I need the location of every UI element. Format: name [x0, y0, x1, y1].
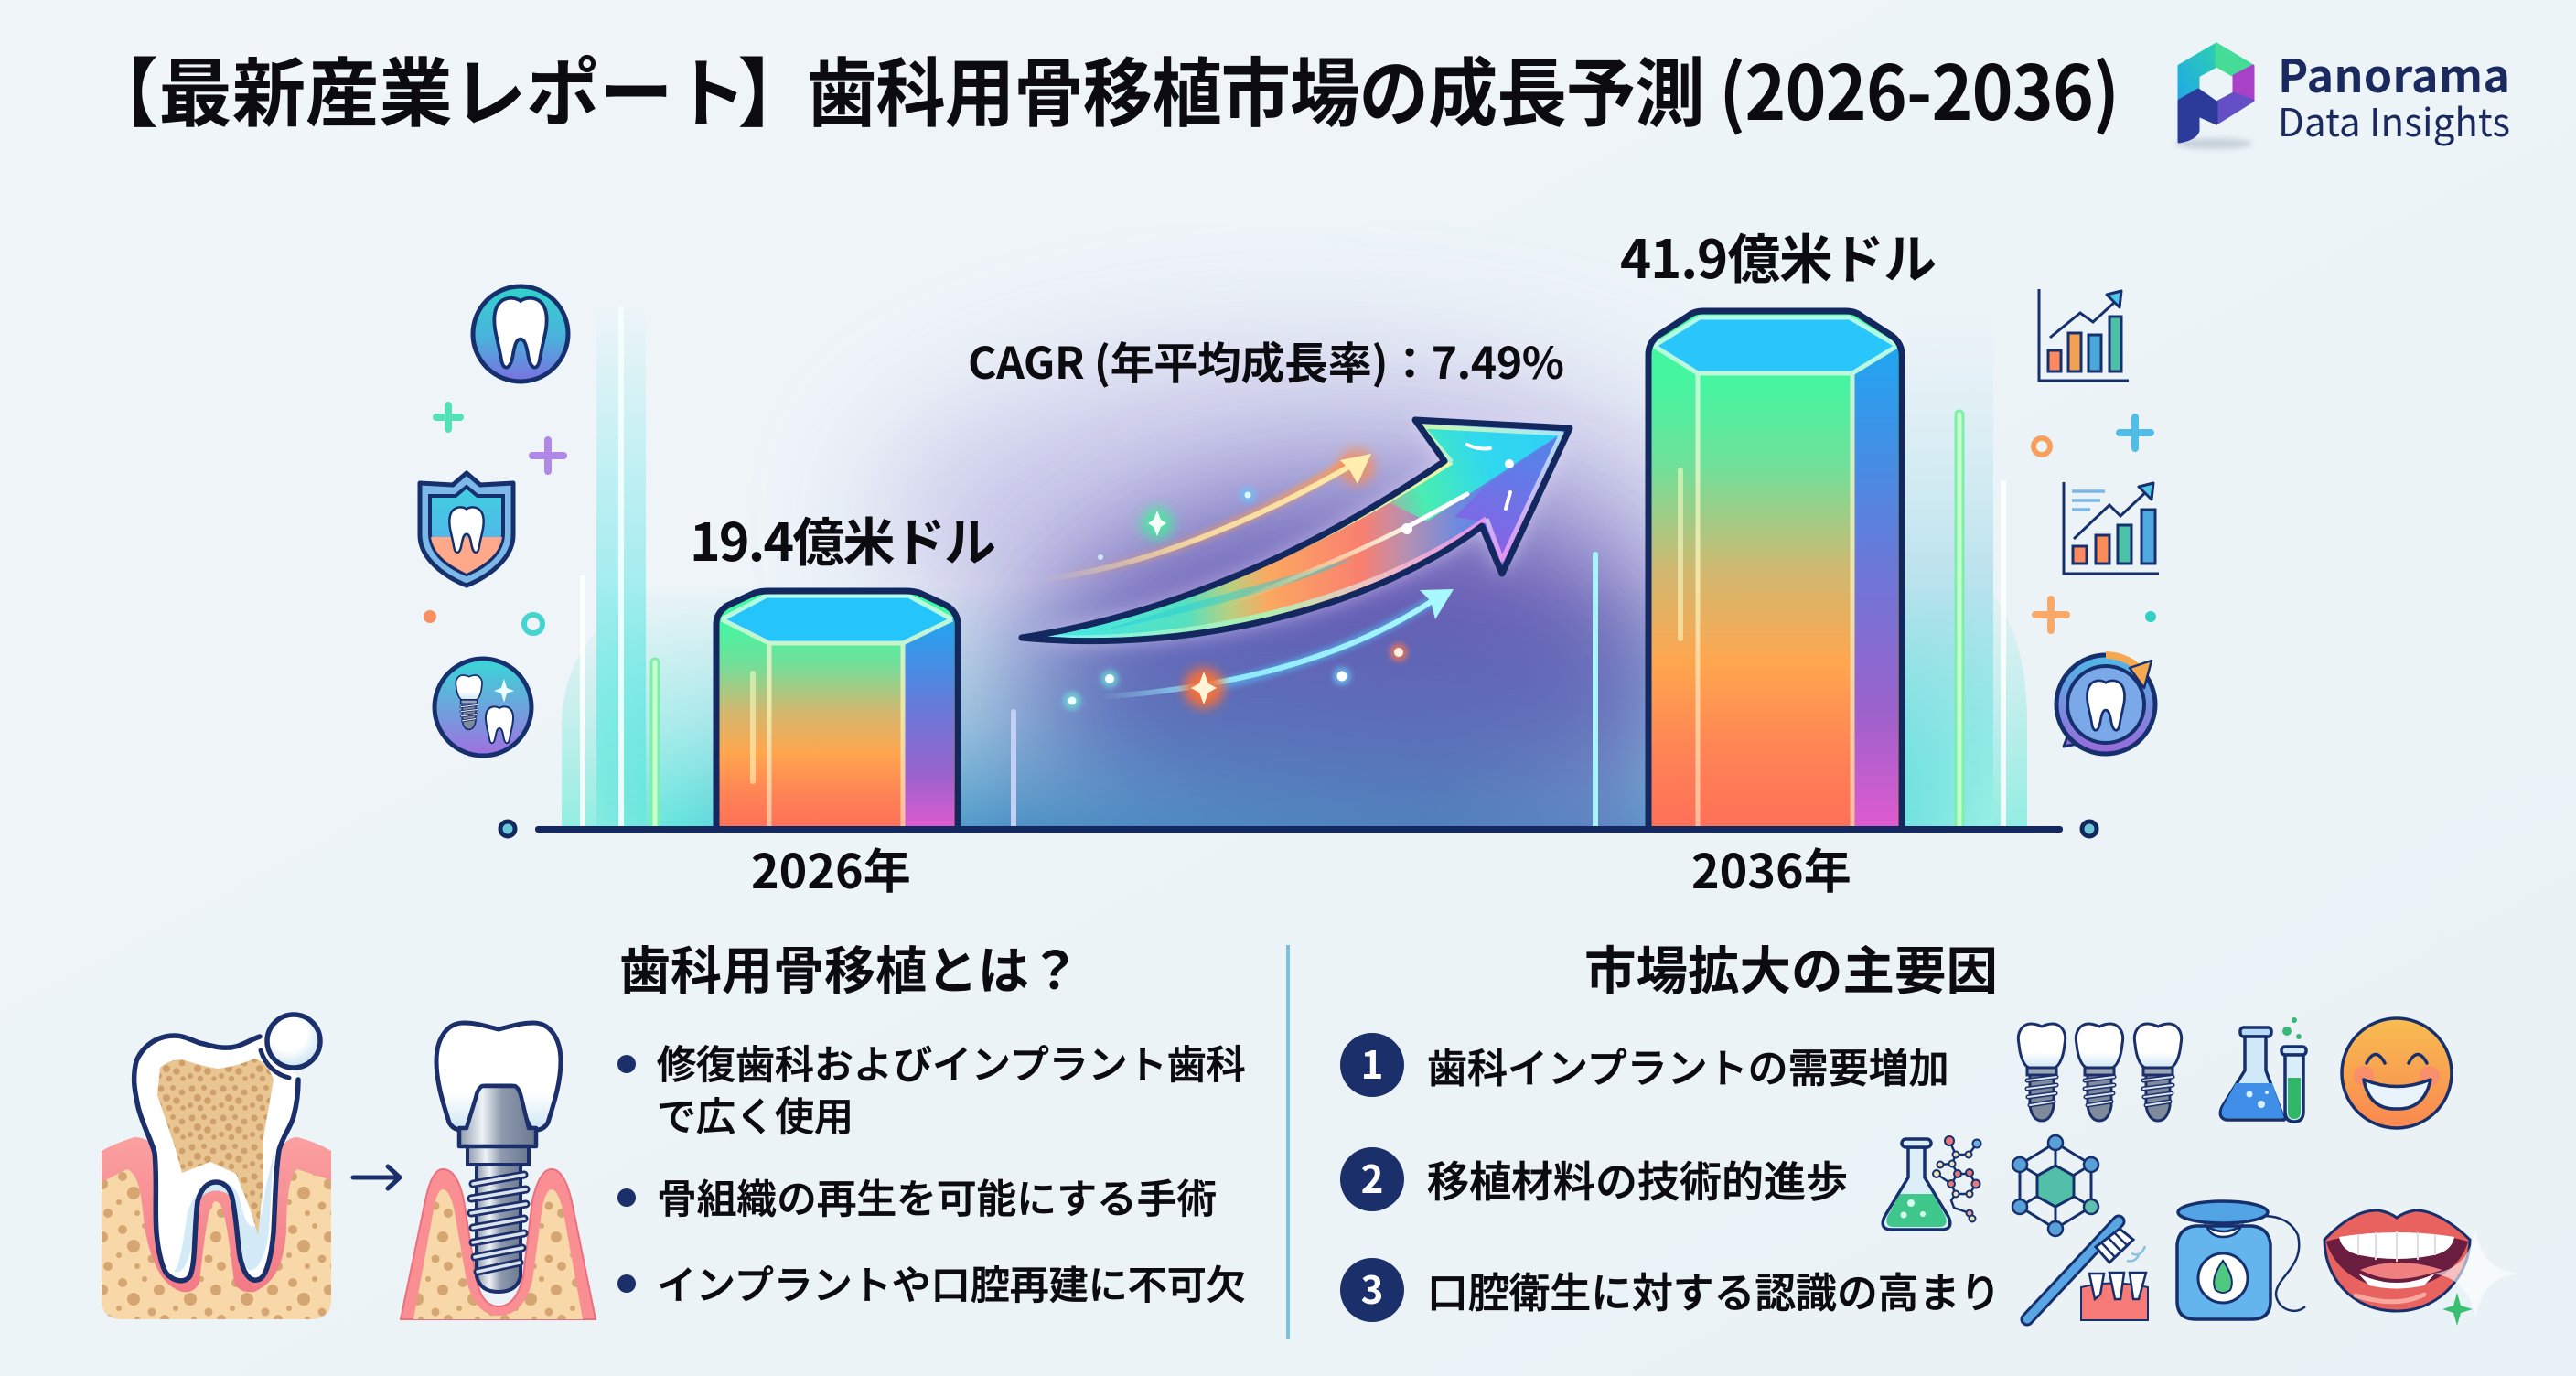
title: 歯科用骨移植市場の成長予測 (2026-2036) [807, 33, 2120, 142]
tooth root shading [174, 1150, 274, 1273]
value label: 2036: 41.9億米ドル [1620, 217, 1937, 294]
driver 1: 1 [1361, 1035, 1383, 1091]
bone graft [157, 1059, 274, 1235]
axis line [500, 822, 2097, 836]
icon: implant badge [435, 659, 531, 756]
bone inside [413, 1189, 583, 1319]
arrow: CAGR growth [1022, 420, 1570, 641]
arrow: small cyan [1100, 589, 1454, 697]
title [85, 33, 2120, 142]
text block: what is bone graft [617, 930, 1246, 1311]
icon: chart one [2039, 289, 2129, 381]
icon: dot teal [2145, 611, 2156, 622]
icon: plus purple [532, 440, 564, 471]
bar chart: market growth 2026 to 2036 [500, 217, 2097, 902]
CAGR label: CAGR (年平均成長率)：7.49% [968, 328, 1564, 392]
text block: market drivers [1340, 930, 2001, 1322]
decorative sparkle [2433, 1231, 2517, 1326]
year label: 2036: 2036年 [1691, 833, 1852, 902]
chart background glow [562, 300, 2027, 826]
bullet list: インプラントや口腔再建に不可欠 [657, 1254, 1246, 1311]
driver 2: 移植材料の技術的進歩 [1427, 1149, 1848, 1209]
collar [467, 1146, 529, 1165]
bullet list: 修復歯科およびインプラント歯科 [657, 1034, 1246, 1091]
heading: 歯科用骨移植とは？ [619, 930, 1080, 1005]
bar: 2026 [714, 591, 960, 829]
tooth fill [134, 1035, 298, 1281]
left decorative icons [420, 286, 568, 756]
gum [102, 1137, 331, 1292]
bullet list [617, 1034, 1246, 1311]
title: 【最新産業レポート】 [85, 34, 811, 142]
icon: plus orange [2035, 599, 2066, 630]
bone block [102, 1162, 331, 1319]
icon: tooth badge [473, 286, 568, 382]
icon: hexagon molecule [2012, 1135, 2098, 1236]
icon: ring orange [2034, 438, 2050, 455]
bone and gum [401, 1169, 596, 1319]
icon: plus green [436, 405, 460, 429]
abutment [459, 1086, 536, 1146]
year label: 2026: 2026年 [751, 833, 911, 902]
icon: dental floss [2177, 1201, 2305, 1319]
driver 1: 歯科インプラントの需要増加 [1427, 1036, 1949, 1094]
icon: tooth cycle badge [2056, 655, 2155, 754]
value label: 2026: 19.4億米ドル [690, 501, 996, 576]
icon: chart two [2064, 482, 2159, 574]
driver 3: 口腔衛生に対する認識の高まり [1427, 1260, 2001, 1319]
illustration: dental implant [401, 1023, 596, 1319]
sparkles and particles [1063, 487, 1408, 710]
icon: plus blue [2120, 417, 2151, 448]
icon: smiling mouth [2324, 1210, 2470, 1311]
icon: toothbrush and teeth [2027, 1221, 2148, 1320]
icon: shield tooth [420, 473, 513, 586]
crown [436, 1023, 561, 1130]
divider [1286, 945, 1290, 1339]
icon: flask and test tube [2220, 1017, 2306, 1122]
right decorative icons [2034, 289, 2159, 754]
heading: 市場拡大の主要因 [1584, 930, 1998, 1005]
bullet list: で広く使用 [657, 1086, 853, 1143]
logo: Panorama Data Insights [2175, 40, 2510, 149]
bullet list: 骨組織の再生を可能にする手術 [657, 1166, 1217, 1225]
graft ball [261, 1015, 320, 1078]
icon: three implants [2018, 1024, 2182, 1121]
tooth outline [134, 1036, 298, 1281]
icon: logo mark [2175, 44, 2253, 149]
icon: dot orange [424, 610, 436, 623]
icon: ring teal [524, 615, 542, 633]
arrow: small orange [1044, 448, 1375, 579]
icon: smiling face [2342, 1018, 2452, 1128]
driver 3: 3 [1361, 1260, 1383, 1316]
brand tagline: Data Insights [2278, 92, 2510, 148]
icon: flask with molecule [1883, 1136, 1981, 1230]
illustration: natural tooth with bone graft [102, 1015, 331, 1319]
brand name: Panorama [2278, 40, 2510, 106]
implant screw [471, 1164, 526, 1292]
arrow: tooth to implant [353, 1166, 400, 1188]
bar: 2036 [1647, 310, 1904, 829]
driver 2: 2 [1361, 1149, 1383, 1205]
